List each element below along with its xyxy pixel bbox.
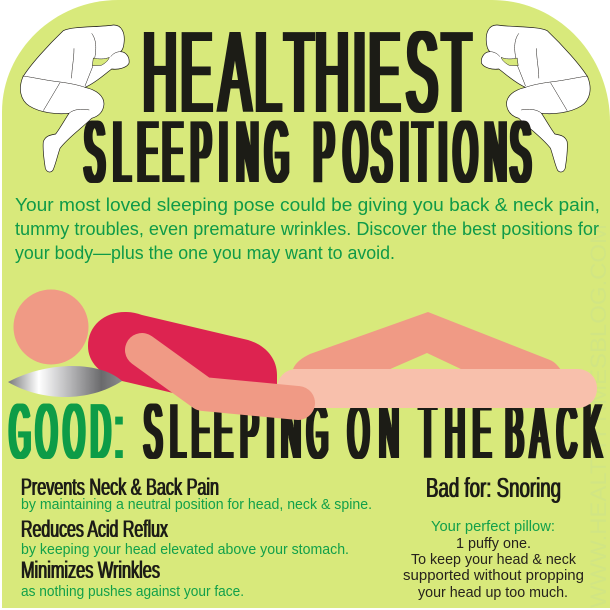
- benefit: wrinkles: [21, 557, 244, 600]
- pillow advice: [403, 519, 584, 601]
- title line 2: SLEEPING POSITIONS: [84, 102, 531, 201]
- pillow advice: Your perfect pillow:: [431, 519, 555, 535]
- title line 1: HEALTHIEST: [143, 7, 471, 137]
- pillow advice: 1 puffy one.: [456, 536, 531, 552]
- pillow: [8, 366, 122, 397]
- intro text: [15, 195, 600, 263]
- icon: curled sleeper right: [481, 25, 590, 172]
- benefit: acid reflux: Reduces Acid Reflux: [21, 516, 168, 543]
- benefit: wrinkles: Minimizes Wrinkles: [21, 557, 160, 584]
- head: [14, 290, 88, 364]
- benefit: neck and back pain: Prevents Neck & Back Pain: [21, 474, 219, 501]
- icon: curled sleeper left: [20, 25, 129, 172]
- benefit: acid reflux: by keeping your head elevated above your stomach.: [21, 542, 349, 558]
- pillow advice: your head up too much.: [418, 585, 568, 601]
- benefits list: [21, 474, 372, 600]
- illustration: person sleeping on back: [8, 290, 597, 408]
- title: [84, 7, 531, 201]
- intro text: your body—plus the one you may want to avoid.: [15, 243, 395, 263]
- pillow advice: To keep your head & neck: [411, 552, 577, 568]
- benefit: wrinkles: as nothing pushes against your face.: [21, 584, 244, 600]
- arm: [142, 350, 298, 403]
- leg raised: [293, 312, 561, 370]
- benefit: neck and back pain: by maintaining a neutral position for head, neck & spine.: [21, 497, 372, 513]
- heading words: sleeping on the back: SLEEPING ON THE BACK: [144, 389, 602, 475]
- benefit: acid reflux: [21, 516, 349, 558]
- leg extended: [277, 369, 597, 408]
- torso: [88, 312, 277, 397]
- heading: good sleeping on the back: [10, 389, 602, 475]
- benefit: neck and back pain: [21, 474, 372, 513]
- pillow advice: supported without propping: [403, 568, 584, 584]
- intro text: tummy troubles, even premature wrinkles. Discover the best positions for: [15, 219, 599, 239]
- intro text: Your most loved sleeping pose could be giving you back & neck pain,: [15, 195, 600, 215]
- heading word: good: GOOD:: [10, 389, 123, 475]
